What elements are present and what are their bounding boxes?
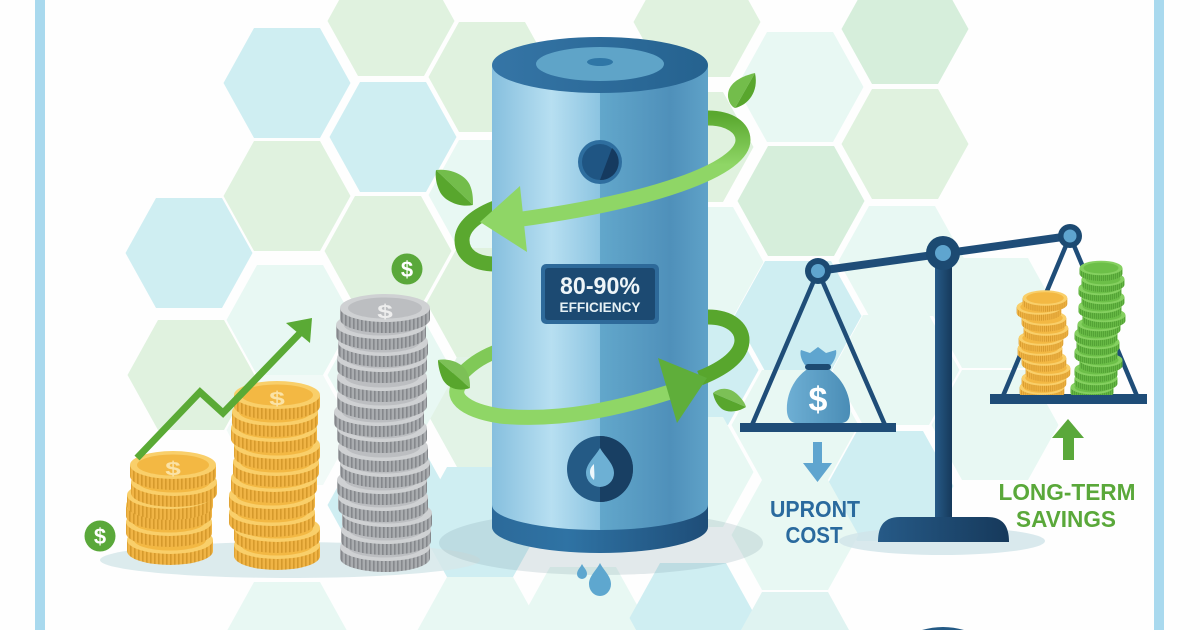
scale beam bbox=[818, 236, 1070, 271]
efficiency arrow upper bbox=[480, 118, 743, 252]
right joint bbox=[1058, 224, 1082, 248]
lid inner disc bbox=[536, 47, 664, 81]
efficiency badge: 80-90% bbox=[560, 273, 640, 300]
left pan bbox=[740, 423, 896, 432]
water drops under tank bbox=[577, 563, 611, 596]
efficiency badge bbox=[541, 264, 659, 324]
balance scale bbox=[740, 224, 1147, 542]
water drop emblem bbox=[567, 436, 633, 502]
water heater tank bbox=[492, 37, 708, 553]
coin stack: small gold bbox=[126, 451, 217, 565]
coin stack on right pan: green bbox=[1070, 261, 1126, 400]
label: upfront cost: COST bbox=[786, 522, 842, 548]
label: long-term savings: LONG-TERM bbox=[998, 479, 1136, 505]
down arrow bbox=[803, 442, 832, 482]
right pan strings bbox=[1003, 236, 1137, 396]
leaf upper left bbox=[436, 170, 473, 206]
coin stack: tall silver: $ bbox=[377, 301, 393, 323]
centre joint bbox=[926, 236, 960, 270]
up arrow bbox=[1052, 419, 1084, 460]
coin stacks shadow bbox=[100, 542, 480, 578]
icon: dollar coin lower bbox=[84, 520, 116, 552]
left pan strings bbox=[752, 271, 885, 425]
scale base shadow bbox=[839, 527, 1045, 555]
tank lid bbox=[492, 37, 708, 93]
leaf lower left bbox=[438, 360, 470, 390]
right border line bbox=[1154, 0, 1164, 630]
growth arrow bbox=[137, 318, 312, 458]
money bag: $ bbox=[809, 381, 828, 419]
hexagon background pattern bbox=[126, 0, 1058, 630]
label: long-term savings bbox=[998, 479, 1136, 532]
label: long-term savings: SAVINGS bbox=[1016, 506, 1116, 532]
coin stack: medium gold bbox=[229, 381, 320, 570]
coin stack: small gold: $ bbox=[165, 458, 181, 480]
scale base bbox=[878, 517, 1009, 542]
icon: dollar coin lower: $ bbox=[94, 524, 106, 549]
icon: dollar coin upper bbox=[392, 254, 422, 284]
label: upfront cost: UPRONT bbox=[770, 496, 860, 522]
tank base band bbox=[492, 505, 708, 553]
leaf top right bbox=[728, 73, 756, 108]
arrow back section: lower left tail bbox=[458, 352, 495, 378]
cropped dark circle at bottom bbox=[922, 627, 964, 630]
coin stack: tall silver bbox=[334, 294, 432, 572]
icon: dollar coin upper: $ bbox=[401, 257, 413, 282]
arrow back section: upper left tail bbox=[462, 208, 495, 264]
tank shadow bbox=[439, 511, 763, 575]
efficiency arrow lower bbox=[457, 317, 742, 423]
left joint bbox=[805, 258, 831, 284]
right pan bbox=[990, 394, 1147, 404]
left border line bbox=[35, 0, 45, 630]
label: upfront cost bbox=[770, 496, 860, 548]
coin stack: medium gold: $ bbox=[269, 388, 285, 410]
tank gauge bbox=[578, 140, 622, 184]
money bag bbox=[787, 347, 850, 423]
scale post bbox=[935, 253, 952, 521]
leaf lower right bbox=[713, 389, 746, 411]
efficiency badge: EFFICIENCY bbox=[560, 299, 641, 315]
lid small cap bbox=[587, 58, 613, 66]
coin stack on right pan: gold bbox=[1017, 290, 1070, 401]
